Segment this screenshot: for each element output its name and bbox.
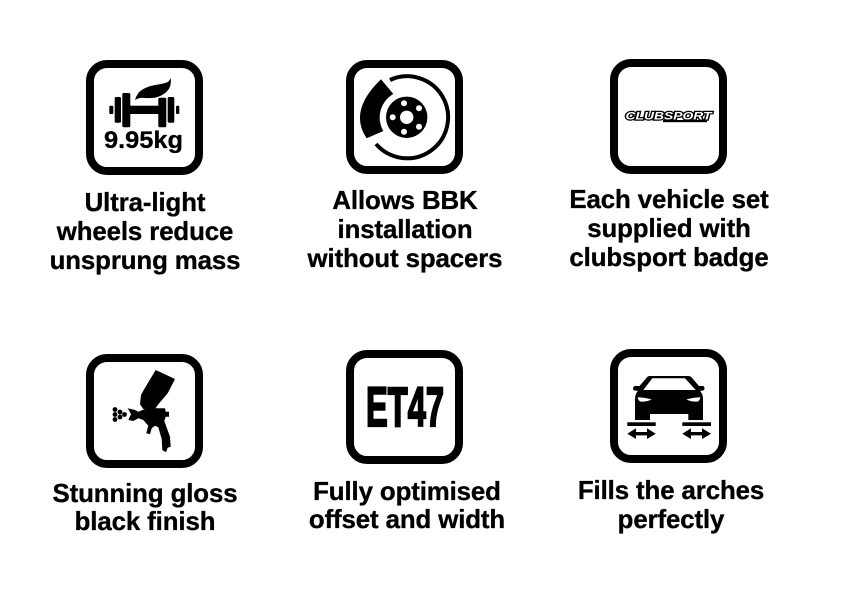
panel: fills the arches: perfectly xyxy=(618,506,725,534)
text: badge caption: Each vehicle set xyxy=(569,186,769,214)
panel: clubsport badge xyxy=(569,63,769,272)
panel: clubsport badge: clubsport badge xyxy=(569,244,769,272)
icon: car with width arrows xyxy=(614,353,723,459)
text: offset caption: Fully optimised xyxy=(313,478,501,506)
panel: big brake kit xyxy=(307,64,502,273)
text: ultra-light caption: Ultra-light xyxy=(85,189,206,217)
panel: big brake kit: without spacers xyxy=(307,245,502,273)
panel: ET47 offset xyxy=(309,354,505,534)
icon: ET47: ET47 xyxy=(366,375,444,438)
icon: dumbbell with feather, 9.95kg xyxy=(90,64,199,171)
panel: fills the arches xyxy=(578,353,764,534)
icon: dumbbell with feather, 9.95kg: 9.95kg xyxy=(104,127,183,154)
icon: ET47 xyxy=(350,354,459,460)
panel: ultra-light wheels: wheels reduce xyxy=(56,218,233,246)
icon: spray gun xyxy=(90,358,199,464)
icon: clubsport logo xyxy=(614,63,723,170)
panel: ET47 offset: offset and width xyxy=(309,506,505,534)
text: gloss caption: Stunning gloss xyxy=(53,480,237,508)
text: arches caption: Fills the arches xyxy=(578,477,764,505)
panel: gloss black finish xyxy=(53,358,237,536)
icon: clubsport logo: CLUBSPORT xyxy=(626,110,713,122)
panel: big brake kit: installation xyxy=(338,216,472,244)
panel: ultra-light wheels xyxy=(50,64,240,275)
panel: ultra-light wheels: unsprung mass xyxy=(50,247,240,275)
text: BBK caption: Allows BBK xyxy=(332,187,478,215)
panel: clubsport badge: supplied with xyxy=(587,215,751,243)
icon: brake disc and caliper xyxy=(350,64,459,170)
panel: gloss black finish: black finish xyxy=(75,508,215,536)
